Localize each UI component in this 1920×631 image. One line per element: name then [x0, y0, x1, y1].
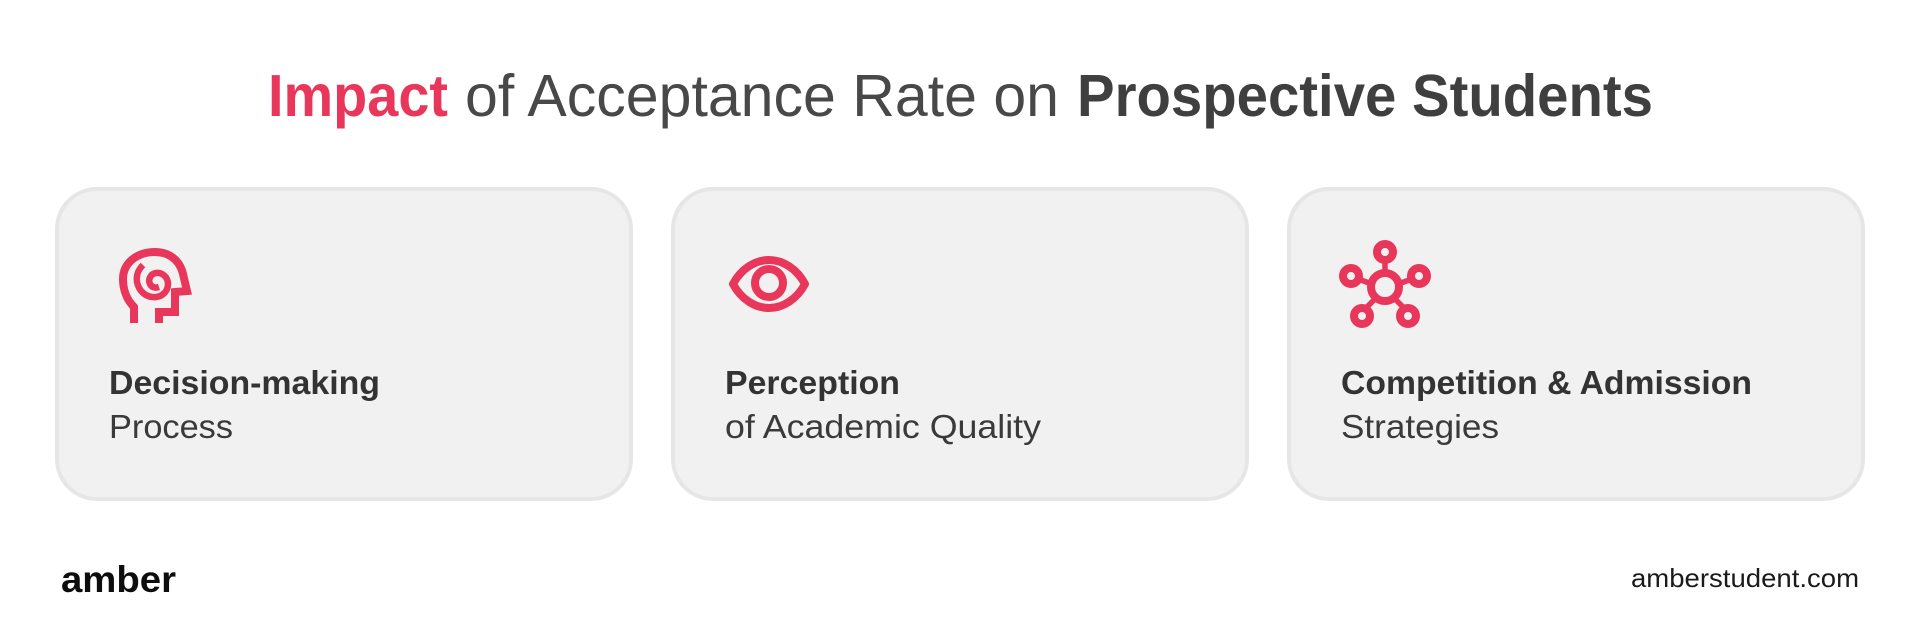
panel: decision-making: [57, 189, 631, 499]
card text: of Academic Quality: [725, 408, 1042, 445]
panel: competition and admission: [1289, 189, 1863, 499]
card text: [725, 364, 1042, 445]
card text: Decision-making: [109, 364, 380, 401]
card text: [1341, 364, 1752, 445]
card text: Perception: [725, 364, 900, 401]
website url: amberstudent.com: [1631, 563, 1859, 593]
title: of Acceptance Rate on: [465, 63, 1059, 129]
icon: network: [1343, 244, 1427, 324]
panel: perception: [673, 189, 1247, 499]
icon: head with spiral: [123, 252, 187, 323]
title: Prospective Students: [1077, 63, 1653, 129]
card text: Strategies: [1341, 408, 1499, 445]
logo: amber: amber: [61, 559, 176, 600]
card text: [109, 364, 380, 445]
card text: Competition & Admission: [1341, 364, 1752, 401]
title: [268, 63, 1653, 129]
icon: eye: [733, 260, 805, 308]
title: Impact: [268, 63, 448, 129]
card text: Process: [109, 408, 233, 445]
